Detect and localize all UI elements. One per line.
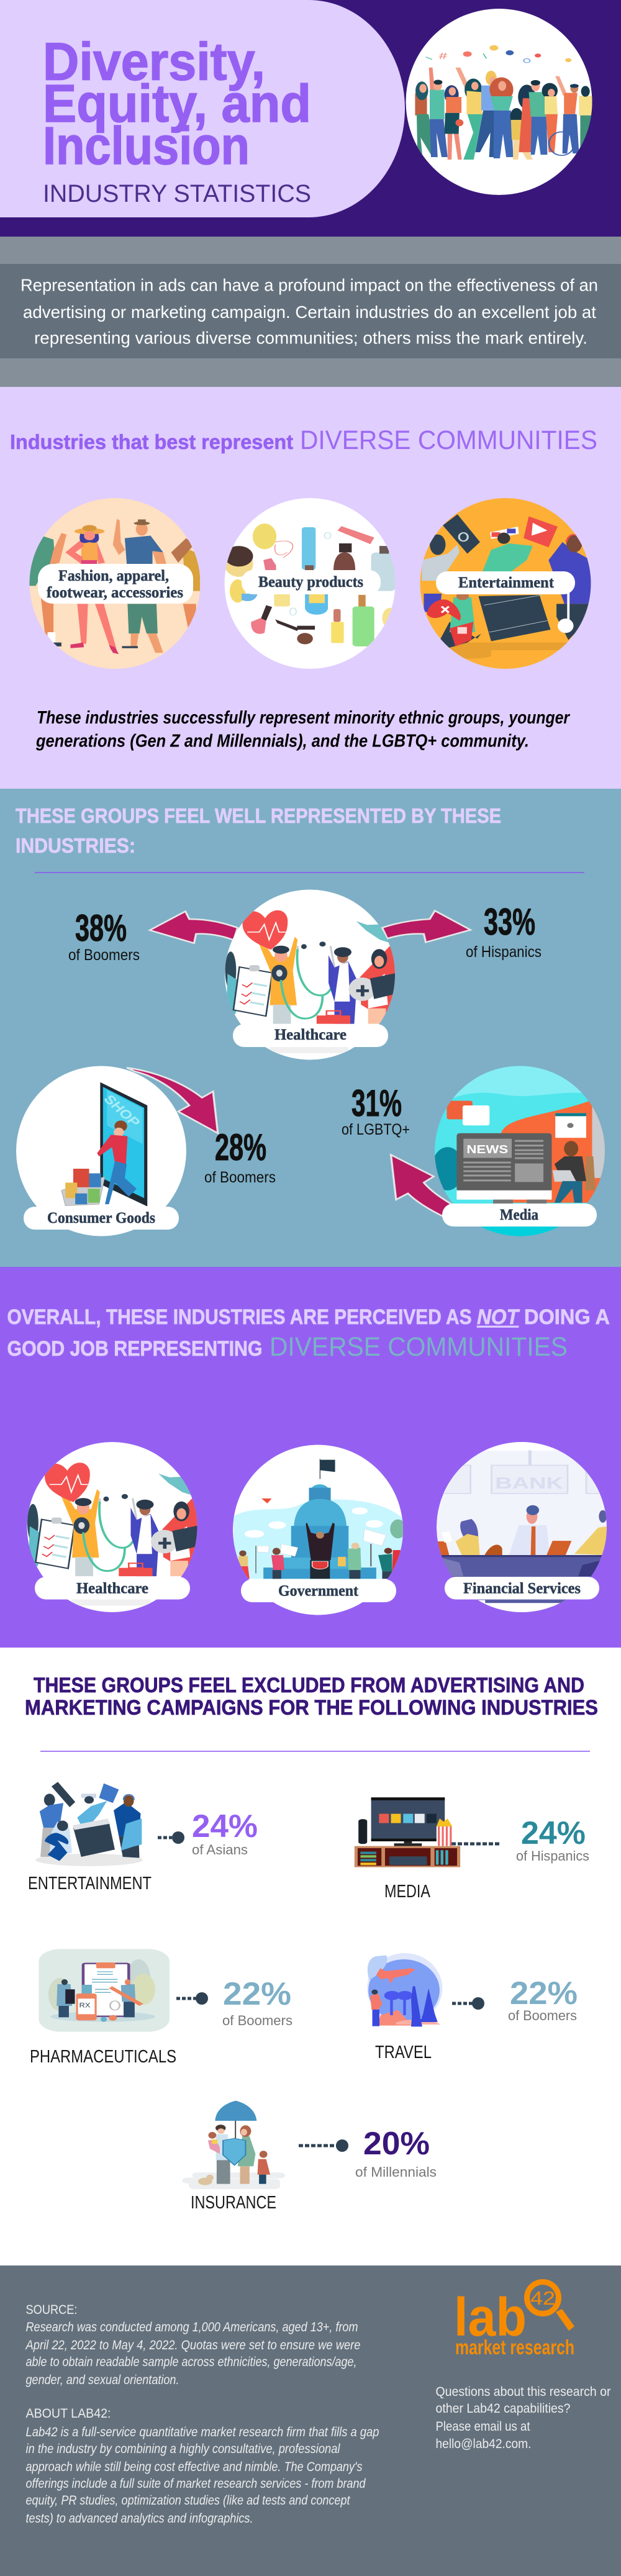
label: [442, 1204, 597, 1227]
stat: 24%: [192, 1808, 258, 1844]
stat: 20%: [363, 2126, 430, 2162]
panel: industries that best represent: [0, 387, 621, 789]
label: PHARMACEUTICALS: [30, 2047, 176, 2067]
card: consumer goods: [16, 1066, 186, 1236]
source and about text: ABOUT LAB42:: [26, 2406, 111, 2421]
stat: 22%: [223, 1976, 291, 2012]
panel: not doing a good job: [0, 1267, 621, 1648]
panel: introduction: [0, 237, 621, 387]
source and about text: in the industry by combining a highly consultative, professional: [26, 2442, 341, 2456]
source and about text: offerings include a full suite of market research services - from brand: [26, 2477, 366, 2491]
stat: 31% of LGBTQ+: [342, 1082, 410, 1138]
card: consumer goods: Consumer Goods: [47, 1210, 155, 1227]
stat: 31% of LGBTQ+: 31%: [351, 1082, 402, 1124]
logo: lab42 market research: market research: [455, 2336, 574, 2359]
arrow: media to lgbtq: [391, 1155, 451, 1217]
item: entertainment: [28, 1782, 258, 1893]
label: [436, 571, 575, 594]
source and about text: tests) to advanced analytics and infographics.: [26, 2511, 253, 2526]
item: travel: [367, 1953, 578, 2062]
logo: lab42 market research: 42: [530, 2287, 555, 2309]
card: government: Government: [278, 1582, 359, 1600]
contact text: [436, 2385, 611, 2451]
card: fashion: [29, 498, 201, 669]
source and about text: [25, 2303, 379, 2526]
label: ENTERTAINMENT: [28, 1874, 152, 1893]
heading: DIVERSE COMMUNITIES: [300, 425, 597, 455]
subtitle: INDUSTRY STATISTICS: [43, 180, 311, 207]
heading: [25, 1674, 598, 1720]
source and about text: equity, PR studies, optimization studies (like ad tests and concept: [26, 2493, 350, 2508]
heading: OVERALL, THESE INDUSTRIES ARE PERCEIVED AS: [7, 1305, 472, 1329]
icon: prescription: [39, 1949, 170, 2032]
contact text: Please email us at: [436, 2420, 530, 2434]
icon: tv cabinet: [355, 1797, 460, 1867]
source and about text: approach while still being cost effective and nimble. The Company's: [26, 2460, 363, 2474]
label: [445, 1577, 599, 1600]
connector: [451, 1842, 501, 1846]
card: entertainment: [420, 498, 591, 669]
stat: 33% of Hispanics: [466, 901, 542, 961]
card: healthcare: Healthcare: [76, 1580, 148, 1597]
card: financial services: BANK: [495, 1474, 563, 1492]
label: [38, 564, 193, 604]
card: media: NEWS: [466, 1143, 508, 1156]
item: pharmaceuticals: [30, 1949, 292, 2067]
source and about text: SOURCE:: [26, 2303, 77, 2317]
icon: entertainment crew: [35, 1782, 143, 1866]
intro text: representing various diverse communities; others miss the mark entirely.: [34, 328, 587, 348]
label: INSURANCE: [191, 2193, 276, 2213]
stat: 33% of Hispanics: 33%: [484, 901, 535, 943]
connector: [176, 1992, 208, 2005]
item: pharmaceuticals: of Boomers: [222, 2013, 292, 2028]
panel: footer: [0, 2265, 621, 2576]
panel: groups feel well represented: [0, 789, 621, 1267]
item: travel: of Boomers: [508, 2008, 577, 2023]
item: entertainment: of Asians: [192, 1842, 248, 1857]
heading: INDUSTRIES:: [16, 834, 135, 857]
title: Diversity, Equity, and Inclusion: [43, 32, 311, 176]
icon: globe and landmarks: [367, 1953, 442, 2026]
icon: prescription: RX: [79, 2002, 91, 2009]
stat: 38% of Boomers: [68, 907, 140, 964]
stat: 28% of Boomers: 28%: [215, 1127, 266, 1168]
source and about text: Research was conducted among 1,000 Americans, aged 13+, from: [26, 2320, 358, 2334]
illustration: diverse crowd: #: [439, 51, 448, 61]
intro text: advertising or marketing campaign. Certain industries do an excellent job at: [23, 302, 596, 322]
card: financial services: Financial Services: [463, 1580, 581, 1597]
card: financial services: [436, 1442, 610, 1612]
item: media: [355, 1797, 589, 1902]
heading: Industries that best represent: [10, 430, 293, 453]
title panel: [0, 0, 405, 217]
logo: lab42 market research: lab: [454, 2287, 527, 2347]
stat: 31% of LGBTQ+: of LGBTQ+: [342, 1121, 410, 1138]
heading: [10, 425, 597, 455]
heading: [7, 1305, 610, 1362]
label: TRAVEL: [375, 2043, 432, 2062]
people: [415, 93, 427, 116]
contact text: other Lab42 capabilities?: [436, 2401, 570, 2416]
label: [242, 570, 381, 594]
connector: [158, 1831, 184, 1844]
logo: lab42 market research: [454, 2282, 574, 2359]
card: media: Media: [500, 1207, 538, 1223]
label: [233, 1024, 388, 1047]
title: Diversity, Equity, and Inclusion: Diversity,: [43, 32, 265, 92]
intro text: [20, 276, 598, 348]
stat: 33% of Hispanics: of Hispanics: [466, 943, 542, 961]
intro text: Representation in ads can have a profound impact on the effectiveness of an: [20, 276, 598, 294]
title: Diversity, Equity, and Inclusion: Inclusion: [43, 117, 250, 176]
illustration: diverse crowd: [406, 9, 592, 195]
card: healthcare: Healthcare: [274, 1027, 347, 1043]
label: [24, 1207, 179, 1230]
source and about text: able to obtain readable sample across ethnicities, generations/age,: [26, 2355, 356, 2369]
body text: [35, 708, 570, 751]
source and about text: April 22, 2022 to May 4, 2022. Quotas were set to ensure we were: [25, 2338, 360, 2352]
stat: 38% of Boomers: of Boomers: [68, 946, 140, 964]
heading: DOING A: [524, 1305, 610, 1329]
panel: groups feel excluded: [0, 1648, 621, 2265]
card: government: [233, 1444, 406, 1615]
arrow: consumer goods to boomers: [127, 1068, 218, 1133]
connector: [299, 2139, 348, 2152]
arrow: left to boomers: [150, 912, 238, 943]
stat: 28% of Boomers: of Boomers: [204, 1169, 276, 1186]
connector: [452, 1997, 484, 2010]
stat: 24%: [521, 1815, 586, 1851]
heading: NOT: [477, 1305, 520, 1329]
item: insurance: of Millennials: [355, 2164, 437, 2180]
card: healthcare: [225, 889, 396, 1059]
card: fashion: footwear, accessories: [47, 584, 183, 601]
source and about text: Lab42 is a full-service quantitative market research firm that fills a gap: [26, 2425, 379, 2439]
card: entertainment: Entertainment: [458, 574, 555, 591]
heading: GOOD JOB REPRESENTING: [7, 1337, 262, 1361]
heading: [16, 804, 501, 857]
contact text: hello@lab42.com.: [436, 2437, 532, 2451]
title: Diversity, Equity, and Inclusion: Equity, and: [43, 75, 311, 134]
item: media: of Hispanics: [516, 1848, 589, 1864]
card: beauty products: Beauty products: [258, 574, 363, 591]
label: [241, 1579, 396, 1602]
card: fashion: Fashion, apparel,: [58, 568, 169, 584]
stat: 28% of Boomers: [204, 1127, 276, 1186]
contact text: Questions about this research or: [436, 2385, 611, 2399]
panel: hero header: [0, 0, 621, 237]
heading: THESE GROUPS FEEL WELL REPRESENTED BY THESE: [16, 804, 501, 827]
card: beauty products: [225, 498, 398, 669]
card: consumer goods: SHOP: [101, 1092, 144, 1129]
icon: family under umbrella: [182, 2101, 285, 2189]
label: [35, 1577, 190, 1600]
card: media: [432, 1064, 606, 1238]
body text: generations (Gen Z and Millennials), and the LGBTQ+ community.: [35, 732, 529, 751]
item: insurance: [182, 2101, 437, 2213]
stat: 38% of Boomers: 38%: [75, 907, 127, 949]
source and about text: gender, and sexual orientation.: [26, 2373, 179, 2387]
stat: 22%: [510, 1975, 578, 2011]
card: healthcare: [27, 1442, 198, 1612]
arrow: right to hispanics: [382, 911, 471, 942]
label: MEDIA: [384, 1882, 431, 1902]
heading: DIVERSE COMMUNITIES: [270, 1332, 568, 1362]
